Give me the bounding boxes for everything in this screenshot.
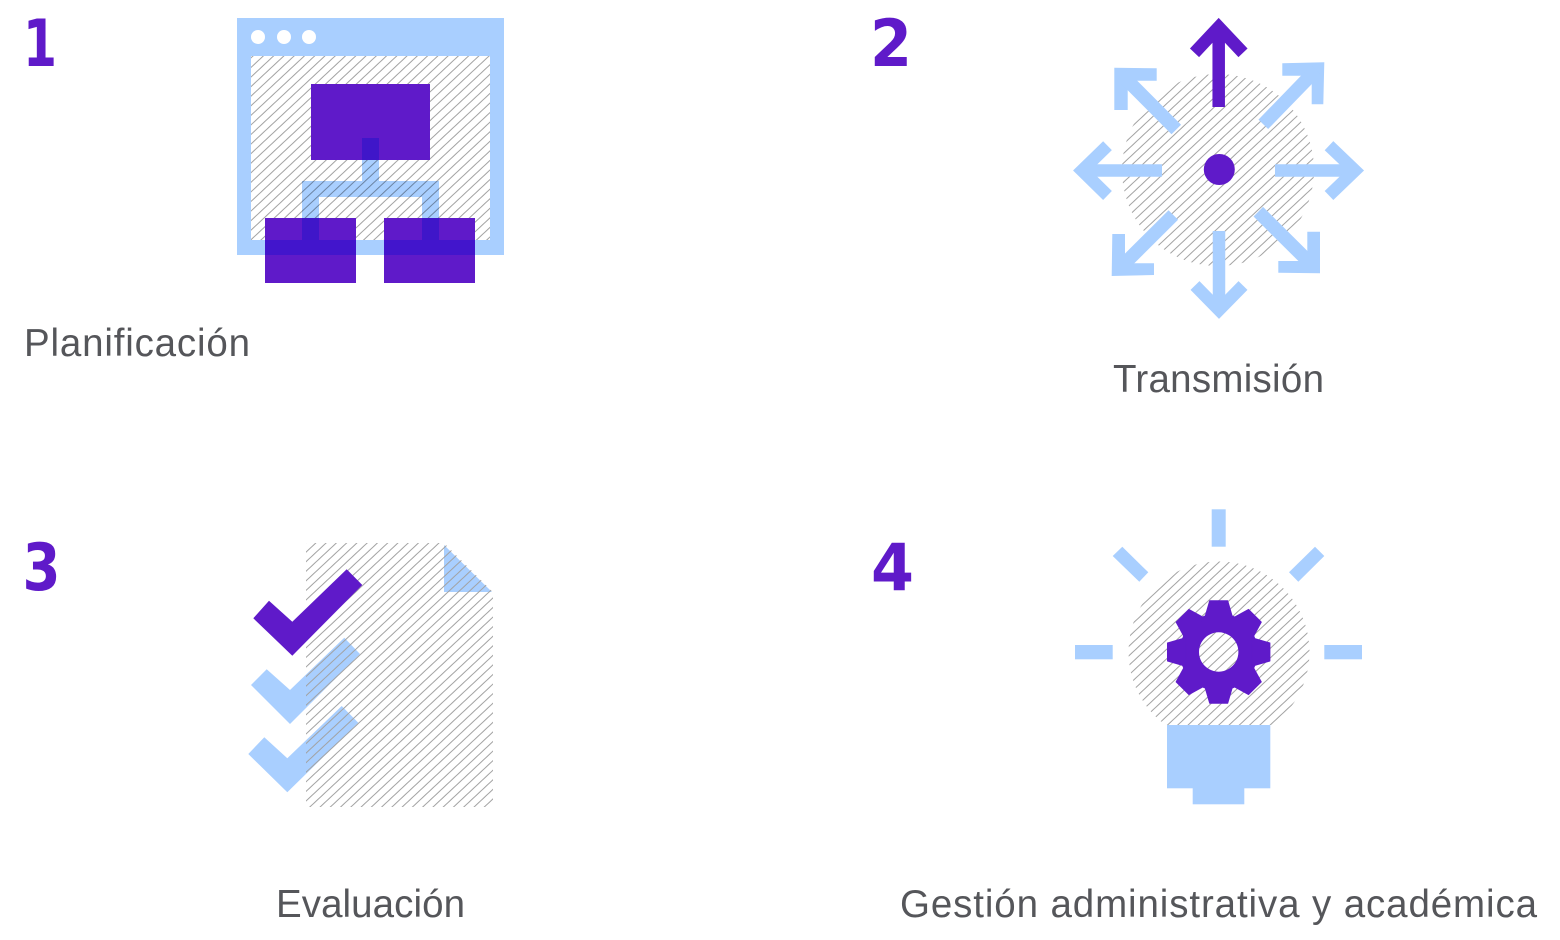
label: Transmisión: Transmisión bbox=[1113, 358, 1324, 401]
number 4: 4 bbox=[871, 531, 914, 606]
icon: light bulb with gear bbox=[1075, 509, 1362, 804]
number 2: 2 bbox=[870, 7, 912, 82]
number 3: 3 bbox=[22, 531, 60, 606]
number 1: 1 bbox=[23, 7, 57, 82]
label: Planificación: Planificación bbox=[24, 322, 250, 365]
icon: central dot with radiating arrows bbox=[1082, 26, 1355, 311]
icon: browser window with flowchart bbox=[237, 18, 504, 283]
label: Evaluación: Evaluación bbox=[276, 883, 465, 926]
icon: checklist document bbox=[248, 543, 493, 807]
label: Gestión administrativa y académica: Gestión administrativa y académica bbox=[900, 883, 1538, 926]
